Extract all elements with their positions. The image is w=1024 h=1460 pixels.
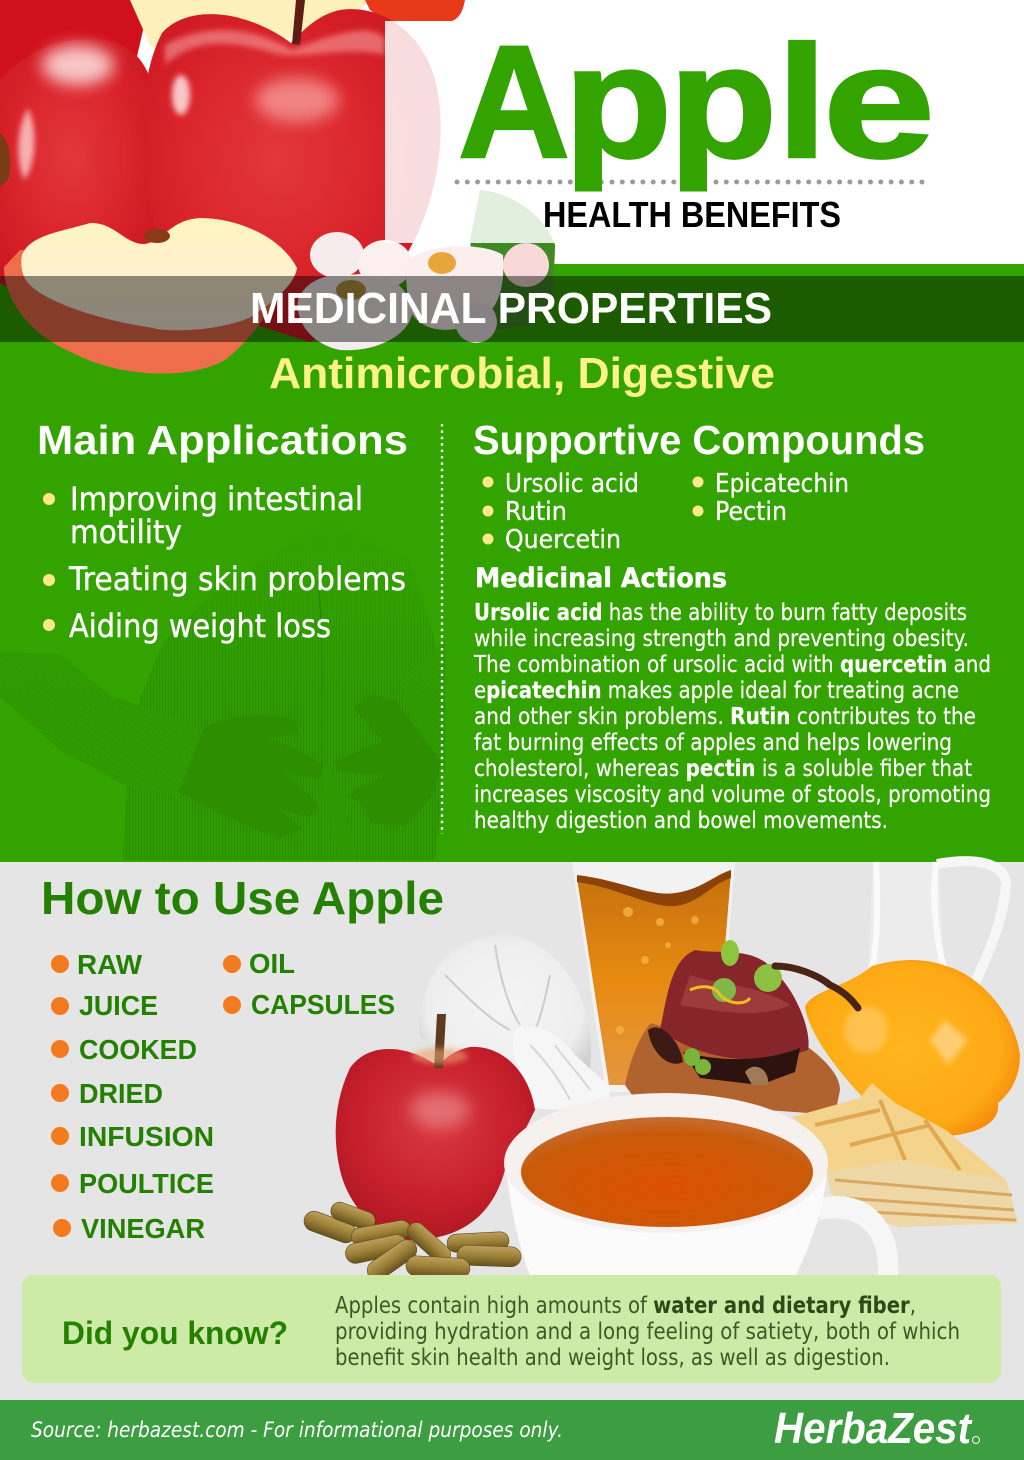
panel: green medicinal section (0, 264, 1024, 862)
text block: medicinal actions: fat burning effects of apples and helps lowering (474, 730, 952, 756)
text block: medicinal actions: and other skin problems. Rutin contributes to the (474, 704, 976, 730)
illustration: cup of tea (504, 1093, 898, 1278)
heading: main applications: Main Applications (37, 417, 408, 463)
text block: medicinal actions: The combination of ursolic acid with quercetin and (473, 652, 991, 678)
illustration: main apple (143, 0, 441, 342)
title: Apple: A (458, 12, 570, 191)
footer bar (0, 1400, 1024, 1460)
callout text: Apples contain high amounts of water and dietary fiber, (335, 1293, 916, 1319)
list: main applications: Treating skin problems (68, 560, 406, 598)
subtitle: health benefits: HEALTH BENEFITS (543, 194, 841, 235)
logo: HerbaZest: HerbaZest (774, 1404, 973, 1453)
illustration: glass of apple juice (572, 862, 735, 1092)
illustration: red apple (336, 1014, 535, 1240)
heading: medicinal actions: Medicinal Actions (475, 563, 727, 594)
callout: did you know (22, 1275, 1001, 1383)
list: supportive compounds: Ursolic acid (505, 469, 639, 499)
panel: how to use (0, 862, 1024, 1400)
list: uses of apple: CAPSULES (251, 989, 395, 1020)
title: Apple: l (777, 12, 827, 191)
list: supportive compounds: Pectin (715, 497, 787, 527)
dotted column divider (441, 424, 443, 834)
illustration: vinegar jar (805, 861, 1020, 1136)
title: Apple: p (669, 12, 777, 191)
illustration: flowers and leaves (298, 190, 555, 350)
list: supportive compounds: Epicatechin (715, 469, 849, 499)
list: supportive compounds: Quercetin (505, 525, 621, 555)
illustration: capsules (301, 1200, 521, 1284)
illustration: back apples (0, 0, 465, 100)
dotted divider (457, 180, 926, 184)
heading: medicinal properties: MEDICINAL PROPERTIES (250, 284, 772, 333)
title: Apple (458, 12, 935, 191)
heading: supportive compounds: Supportive Compounds (473, 417, 925, 463)
list: uses of apple: POULTICE (79, 1168, 214, 1199)
list: uses of apple: VINEGAR (81, 1213, 205, 1244)
subheading: antimicrobial, digestive: Antimicrobial, Digestive (269, 349, 775, 398)
illustration: white overlay panel (385, 21, 1024, 243)
illustration: apple pie slice (792, 1083, 1018, 1227)
text block: medicinal actions: Ursolic acid has the ability to burn fatty deposits (474, 600, 967, 626)
callout text (335, 1293, 960, 1371)
callout text: benefit skin health and weight loss, as well as digestion. (335, 1345, 890, 1371)
band: medicinal properties (0, 276, 1024, 342)
list: uses of apple: OIL (249, 948, 295, 979)
list: uses of apple: COOKED (79, 1034, 197, 1065)
text block: medicinal actions (473, 600, 991, 834)
list: main applications (43, 480, 406, 645)
list: supportive compounds (482, 469, 849, 555)
illustration: baked apple (625, 940, 858, 1115)
footer source text: Source: herbazest.com - For informational purposes only. (31, 1418, 563, 1442)
list: uses of apple: JUICE (79, 990, 158, 1021)
background: white header (0, 0, 1024, 264)
title: Apple: p (564, 12, 672, 191)
list: uses of apple (51, 948, 395, 1244)
list: main applications: Improving intestinal (70, 480, 363, 518)
list: main applications: Aiding weight loss (69, 607, 331, 645)
illustration: left apple (0, 39, 165, 300)
list: uses of apple: RAW (77, 949, 143, 980)
list: uses of apple: DRIED (79, 1078, 163, 1109)
text block: medicinal actions: epicatechin makes apple ideal for treating acne (474, 678, 959, 704)
illustration: apple slice (4, 218, 297, 374)
list: main applications: motility (70, 513, 182, 551)
text block: medicinal actions: healthy digestion and bowel movements. (474, 808, 888, 834)
heading: how to use apple: How to Use Apple (41, 872, 444, 924)
title: Apple: e (823, 12, 935, 191)
list: supportive compounds: Rutin (505, 497, 567, 527)
list: uses of apple: INFUSION (79, 1121, 214, 1152)
illustration: herbal poultice (419, 932, 610, 1110)
callout heading: Did you know? (62, 1315, 288, 1351)
illustration: person holding stomach (0, 515, 445, 860)
text block: medicinal actions: cholesterol, whereas pectin is a soluble fiber that (474, 756, 972, 782)
